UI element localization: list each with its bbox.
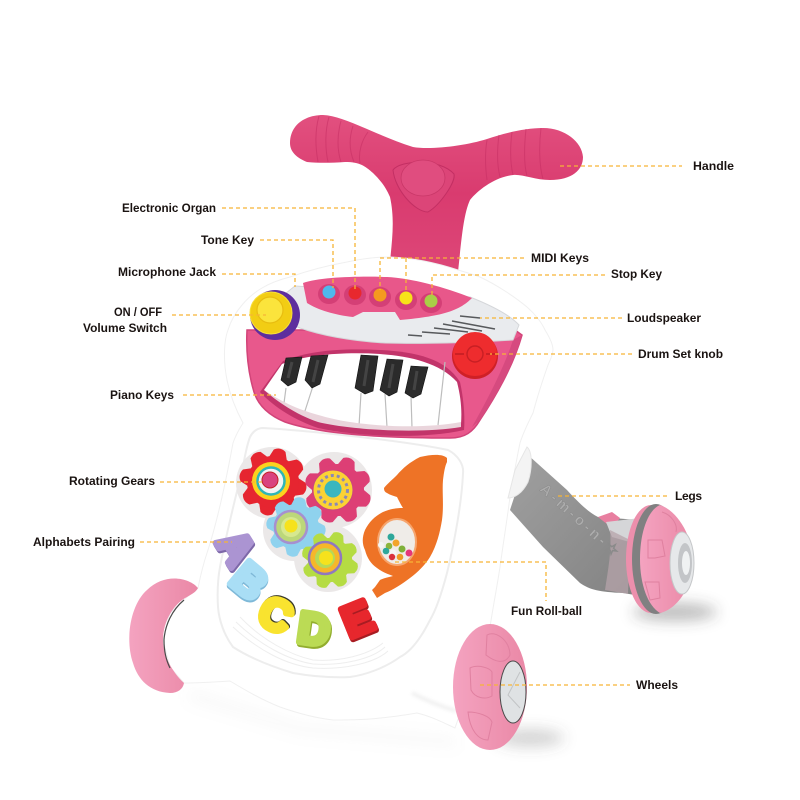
loudspeaker grille <box>408 316 495 336</box>
callout: Drum Set knob: Drum Set knob <box>638 347 723 361</box>
alphabet blocks <box>207 521 381 658</box>
callout: MIDI Keys: MIDI Keys <box>531 251 589 265</box>
ball window <box>378 519 416 565</box>
on/off volume knob <box>250 290 300 340</box>
leg <box>510 455 640 595</box>
callout: Wheels: Wheels <box>636 678 678 692</box>
balls <box>378 534 412 560</box>
rotating gears <box>233 442 382 596</box>
rear wheel hub <box>670 532 694 594</box>
letter D: D <box>295 603 333 656</box>
white keys <box>264 353 461 428</box>
molded brand text on leg: A-m-o-n-☆ <box>536 480 622 560</box>
ground shadows <box>190 603 717 747</box>
piano key opening <box>260 349 464 436</box>
red gear <box>233 442 313 522</box>
black keys <box>281 355 428 398</box>
letter E: E <box>336 593 381 650</box>
callout: Stop Key <box>432 267 662 298</box>
letter B: B <box>221 552 277 610</box>
callout: ON / OFF Volume Switch: Volume Switch <box>83 321 167 335</box>
callout: Fun Roll-ball <box>395 562 582 618</box>
callout: ON / OFF Volume Switch <box>83 305 266 335</box>
callout: Stop Key: Stop Key <box>611 267 662 281</box>
pink gear <box>294 446 382 534</box>
walker body <box>163 257 553 728</box>
rear wheel <box>626 504 694 614</box>
callout: Handle: Handle <box>693 159 734 173</box>
piano keys <box>264 353 461 431</box>
callout: MIDI Keys <box>380 251 589 293</box>
leg mount <box>508 447 531 498</box>
handle grip ribs <box>316 116 543 180</box>
handle emblem <box>393 160 454 212</box>
letter C: C <box>251 586 300 644</box>
button sockets <box>318 284 442 313</box>
callout: ON / OFF Volume Switch: ON / OFF <box>114 305 162 319</box>
green gear <box>294 524 366 596</box>
callout: Piano Keys: Piano Keys <box>110 388 174 402</box>
callout: Alphabets Pairing: Alphabets Pairing <box>33 535 135 549</box>
callout: Legs: Legs <box>675 489 702 503</box>
lower activity panel <box>218 428 463 677</box>
callout: Fun Roll-ball: Fun Roll-ball <box>511 604 582 618</box>
wheel hub <box>500 661 526 723</box>
letter A: A <box>207 521 265 574</box>
callout: Tone Key: Tone Key <box>201 233 254 247</box>
red button <box>348 286 362 300</box>
callout: Tone Key <box>201 233 333 288</box>
callout: Loudspeaker: Loudspeaker <box>627 311 701 325</box>
stop key button <box>424 294 438 308</box>
callout: Rotating Gears: Rotating Gears <box>69 474 155 488</box>
rear leg with wheel <box>510 455 694 614</box>
keyboard housing <box>247 277 522 438</box>
drum set knob <box>452 332 498 379</box>
orange MIDI button <box>374 288 386 302</box>
control band <box>262 286 519 343</box>
right front wheel <box>453 624 527 750</box>
callout: Microphone Jack <box>118 265 295 287</box>
tone key button <box>322 286 336 298</box>
letter E: E <box>335 591 380 648</box>
left front wheel <box>129 578 198 693</box>
handle <box>290 115 583 272</box>
callout: Electronic Organ <box>122 201 355 290</box>
yellow MIDI button <box>400 292 412 304</box>
letter D: D <box>296 605 334 658</box>
gear wells <box>236 447 372 592</box>
button panel <box>303 277 472 320</box>
callout: Microphone Jack: Microphone Jack <box>118 265 216 279</box>
blue gear <box>262 493 330 561</box>
orange roll-ball horn <box>363 455 447 598</box>
letter A: A <box>208 523 266 576</box>
callout: Electronic Organ: Electronic Organ <box>122 201 216 215</box>
letter B: B <box>221 554 277 612</box>
letter C: C <box>252 585 301 643</box>
